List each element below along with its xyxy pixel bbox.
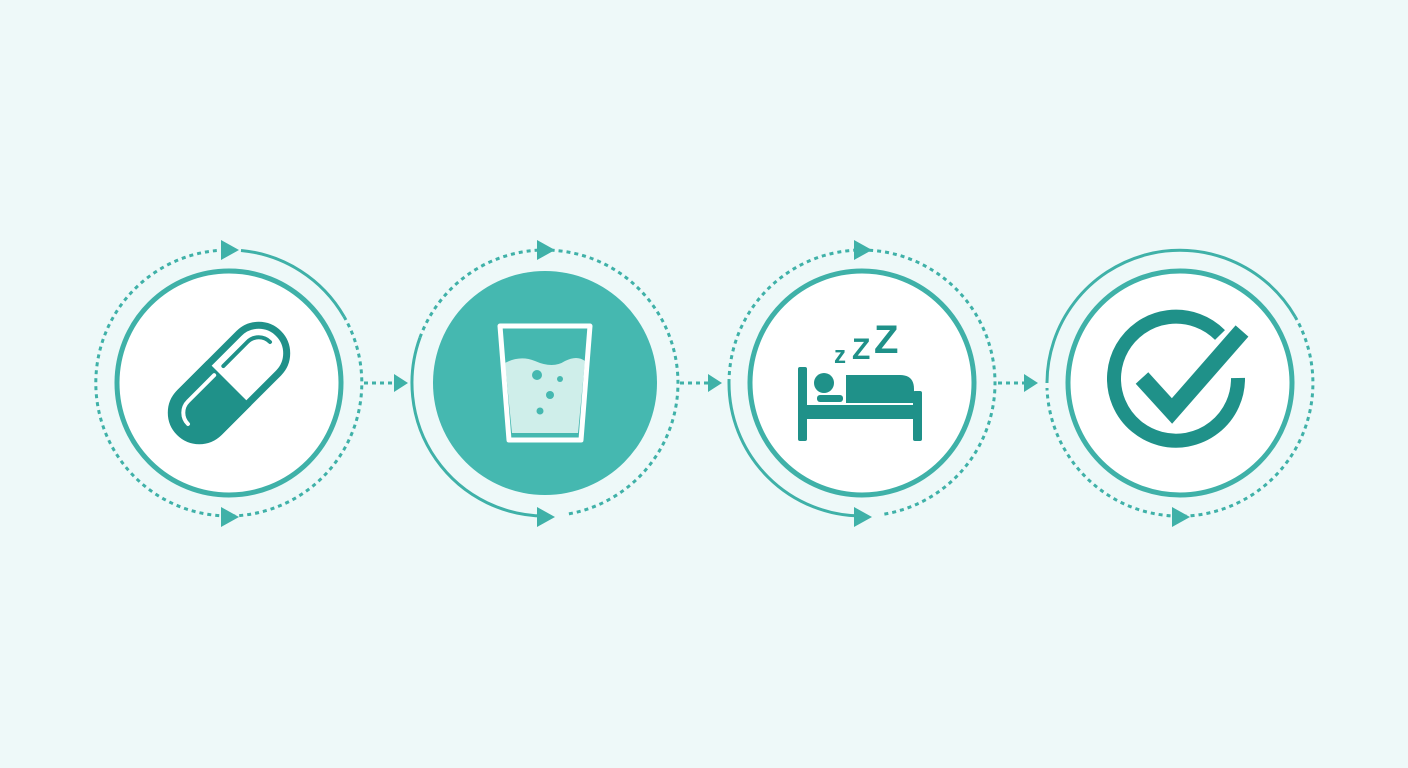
connector arrow 2	[680, 374, 722, 392]
filled circle	[433, 271, 657, 495]
icon: glass	[500, 326, 590, 440]
inner circle	[117, 271, 341, 495]
icon: pill	[155, 311, 301, 457]
icon: bed with zzz: Z	[852, 333, 870, 366]
connector arrow 3	[998, 374, 1038, 392]
outer ring 2	[412, 250, 678, 516]
connector arrow 1	[364, 374, 408, 392]
step 2: water glass	[412, 240, 678, 527]
step 3: sleep	[729, 240, 995, 527]
step 1: pill	[96, 240, 362, 527]
icon: bed with zzz: z	[834, 342, 846, 369]
outer ring 4	[1047, 250, 1313, 516]
arrows	[221, 240, 239, 527]
icon: check circle	[1114, 317, 1242, 441]
icon: bed with zzz	[798, 318, 922, 441]
outer ring 1	[96, 250, 362, 516]
outer ring 3	[729, 250, 995, 516]
icon: bed with zzz: Z	[874, 318, 898, 362]
step 4: check	[1047, 250, 1313, 527]
